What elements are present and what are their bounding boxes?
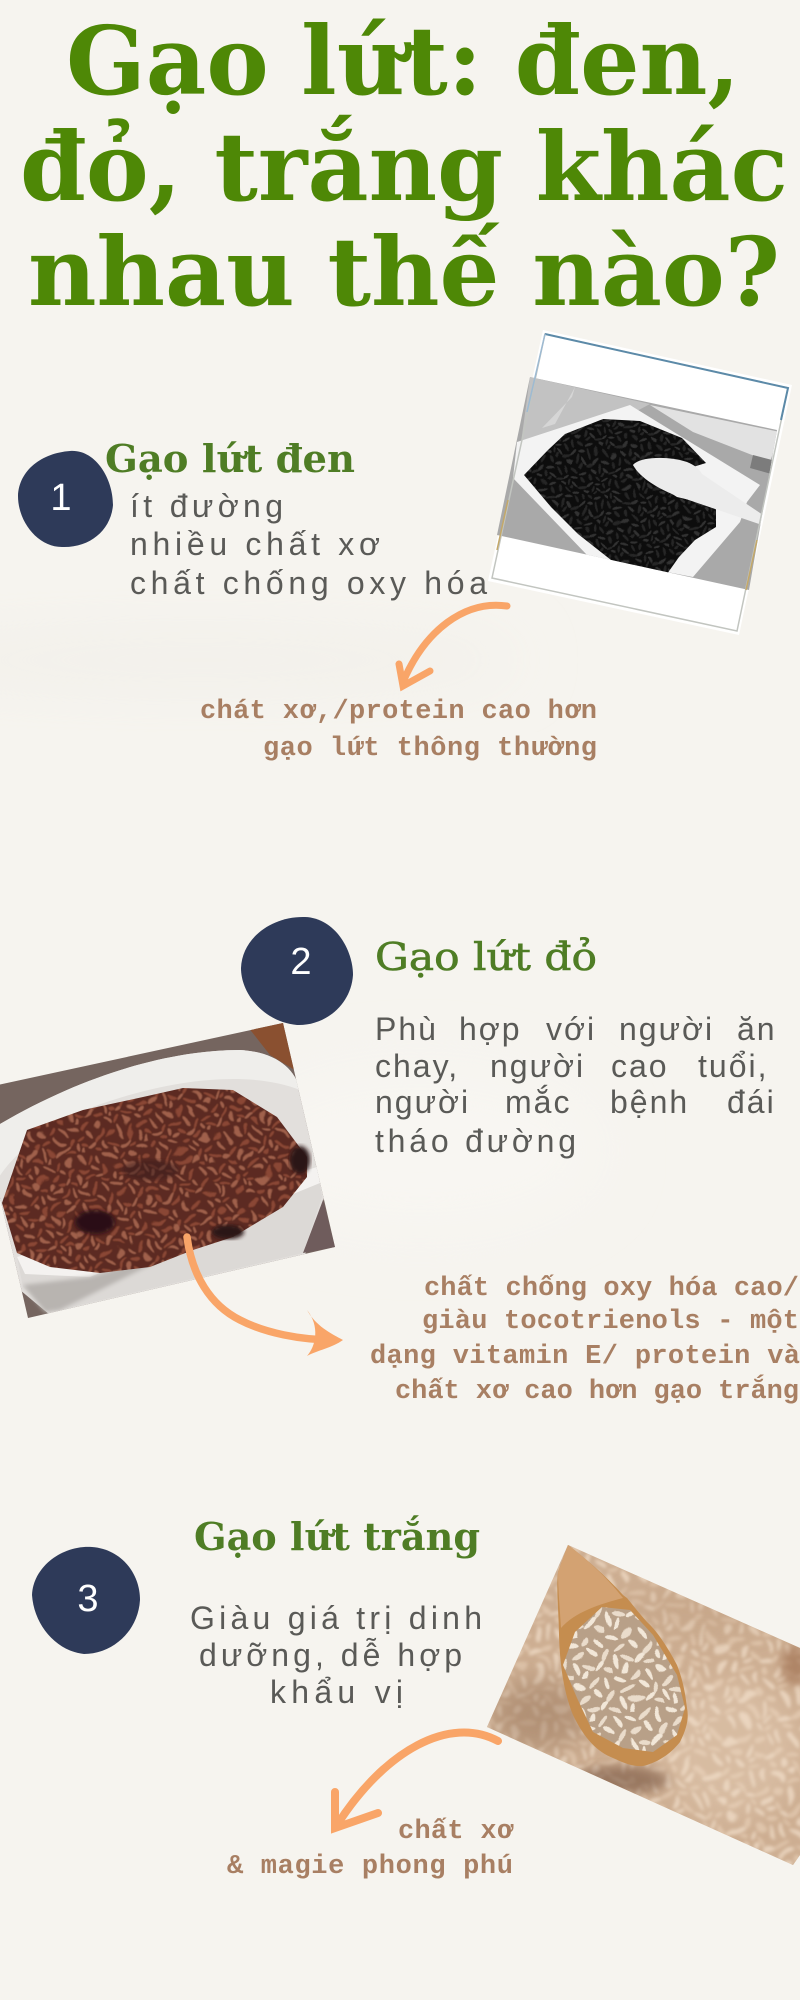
arrow [335, 1732, 498, 1828]
description text: mắc [505, 1084, 571, 1120]
description text: người [490, 1048, 585, 1084]
caption: dạng vitamin E/ protein và [370, 1342, 800, 1372]
description text: hợp [459, 1011, 522, 1047]
description text: ăn [737, 1011, 777, 1047]
description text: đái [727, 1084, 776, 1120]
caption: chất xơ cao hơn gạo trắng [395, 1373, 799, 1407]
caption: chất xơ [398, 1816, 514, 1847]
number badge 3: 3 [77, 1578, 99, 1620]
caption: gạo lứt thông thường [263, 734, 597, 764]
arrow [399, 605, 507, 686]
caption: & magie phong phú [227, 1852, 513, 1882]
caption: giàu tocotrienols - một [422, 1307, 799, 1337]
title [20, 6, 788, 328]
description text: người [619, 1011, 714, 1047]
number badge 1: 1 [50, 477, 72, 519]
description text: dưỡng, dễ hợp [199, 1637, 462, 1673]
heading: black brown rice: Gạo lứt đen [105, 436, 355, 481]
panel: black brown rice [18, 330, 800, 764]
description text: bệnh [610, 1084, 689, 1120]
benefits text: ít đường [130, 488, 283, 524]
description text: người [375, 1084, 470, 1120]
description text: tuổi, [698, 1048, 768, 1084]
number badge 2 [241, 917, 353, 1025]
benefits text: chất chống oxy hóa [130, 565, 487, 601]
title: nhau thế nào? [28, 217, 780, 328]
description text: Phù [375, 1011, 438, 1047]
description text: Giàu giá trị dinh [190, 1600, 482, 1636]
arrow [187, 1237, 343, 1356]
panel: red brown rice [0, 917, 800, 1407]
heading: white brown rice: Gạo lứt trắng [194, 1514, 480, 1559]
title: Gạo lứt: đen, [66, 6, 740, 117]
number badge 3 [32, 1547, 140, 1654]
description text: cao [611, 1048, 669, 1084]
description text: khẩu vị [270, 1674, 403, 1710]
photo: red rice in white bowl [0, 1023, 335, 1318]
caption [227, 1816, 514, 1882]
caption [370, 1273, 800, 1407]
photo: brown rice on wooden spoon [487, 1545, 800, 1865]
benefits text [130, 488, 487, 601]
description text: tháo đường [375, 1123, 576, 1159]
description text [375, 1011, 777, 1159]
description text [190, 1600, 482, 1710]
caption: chát xơ,/protein cao hơn [200, 697, 597, 727]
caption [200, 697, 597, 764]
description text: chay, [375, 1048, 459, 1084]
panel: white brown rice [32, 1510, 800, 1890]
heading: red brown rice: Gạo lứt đỏ [375, 935, 597, 979]
benefits text: nhiều chất xơ [130, 526, 380, 562]
description text: với [546, 1011, 596, 1047]
number badge 2: 2 [290, 941, 312, 983]
title: đỏ, trắng khác [20, 112, 788, 223]
number badge 1 [18, 451, 113, 547]
photo: black rice in white plate [480, 330, 800, 635]
caption: chất chống oxy hóa cao/ [424, 1273, 799, 1304]
